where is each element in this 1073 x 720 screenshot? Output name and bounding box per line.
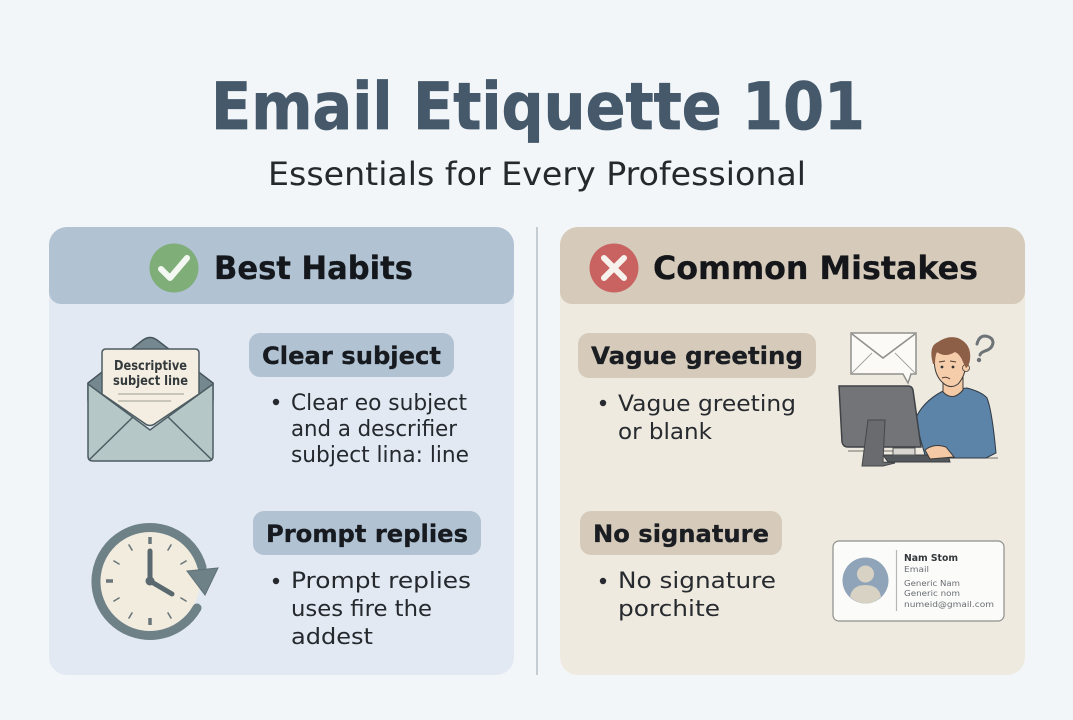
best habits header <box>49 227 514 304</box>
signature card: numeid@gmail.com <box>904 600 994 609</box>
no signature bullet text: No signature <box>618 569 776 594</box>
clear subject bullet text: and a descrifier <box>291 417 458 442</box>
icon: envelope with letter <box>88 338 213 461</box>
panel: best habits <box>49 227 514 675</box>
prompt replies bullet text: Prompt replies <box>291 569 471 594</box>
icon: envelope with letter: subject line <box>113 374 188 389</box>
pill: vague greeting: Vague greeting <box>591 342 803 370</box>
vague greeting bullet text <box>600 392 796 445</box>
prompt replies bullet text <box>273 569 471 650</box>
signature card: Generic nom <box>904 589 960 598</box>
pill: clear subject <box>249 333 454 377</box>
pill: prompt replies: Prompt replies <box>266 520 468 548</box>
clear subject bullet text <box>273 391 469 468</box>
common mistakes header <box>560 227 1025 304</box>
clear subject bullet text: subject lina: line <box>291 443 469 468</box>
pill: no signature: No signature <box>593 520 769 548</box>
vague greeting bullet text: Vague greeting <box>618 392 796 417</box>
common mistakes heading: Common Mistakes <box>653 249 978 287</box>
icon: envelope with letter: Descriptive <box>114 359 187 374</box>
no signature bullet text <box>600 569 776 622</box>
pill: prompt replies <box>253 511 481 555</box>
icon: confused person at computer <box>839 333 998 466</box>
icon: cross mark <box>590 244 638 292</box>
signature card: Generic Nam <box>904 579 960 588</box>
vague greeting bullet text: or blank <box>618 420 712 445</box>
subtitle: Essentials for Every Professional <box>268 155 806 193</box>
prompt replies bullet text: addest <box>291 625 373 650</box>
title: Email Etiquette 101 <box>211 70 865 145</box>
no signature bullet text: porchite <box>618 597 720 622</box>
signature card: Email <box>904 565 929 574</box>
pill: clear subject: Clear subject <box>262 342 441 370</box>
icon: check mark <box>150 244 198 292</box>
best habits heading: Best Habits <box>214 249 413 287</box>
icon: clock with arrow <box>96 527 218 635</box>
clear subject bullet text: Clear eo subject <box>291 391 467 416</box>
prompt replies bullet text: uses fire the <box>291 597 432 622</box>
icon: avatar <box>842 558 888 604</box>
signature card <box>833 541 1004 621</box>
pill: no signature <box>580 511 782 555</box>
signature card: Nam Stom <box>904 553 958 564</box>
pill: vague greeting <box>578 333 816 378</box>
panel: common mistakes <box>560 227 1025 675</box>
